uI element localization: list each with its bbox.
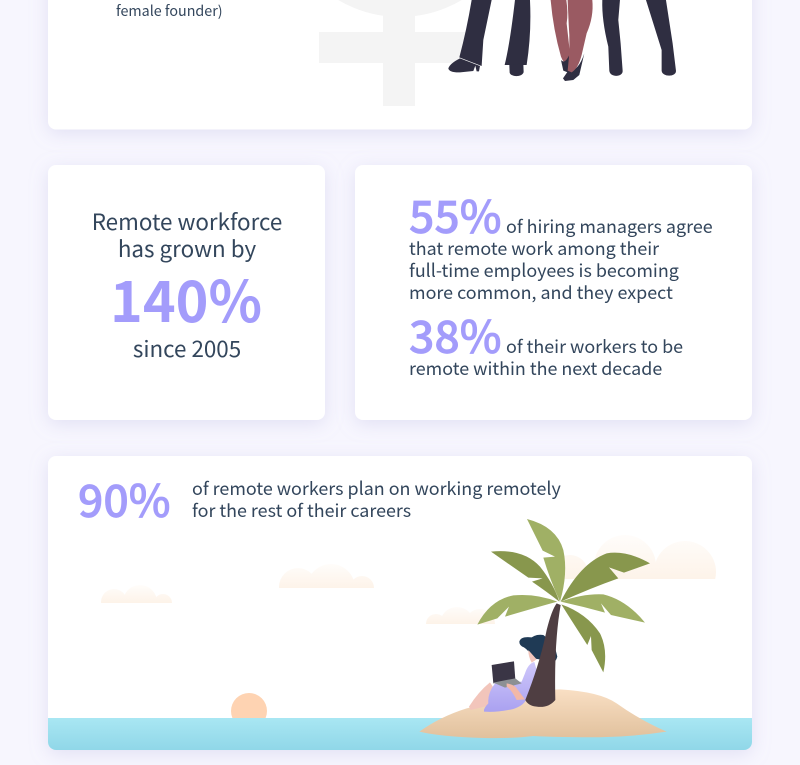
text: workers remote statement: remote within the next decade [409, 355, 662, 381]
panel: hiring managers [355, 165, 752, 420]
text: hiring managers statement: that remote work among their [409, 235, 659, 261]
illustration: island with palm and remote worker [419, 519, 667, 738]
stat: 140%: 140% [110, 257, 262, 339]
text: remote careers statement: of remote workers plan on working remotely [192, 475, 562, 501]
panel: female founders [48, 0, 752, 130]
woman with laptop [469, 635, 557, 712]
stat: 55%: 55% [409, 181, 502, 246]
palm trunk [525, 603, 561, 707]
stat: 38%: 38% [409, 301, 502, 366]
icon: female symbol watermark [319, 0, 473, 106]
stat: 90%: 90% [78, 465, 171, 530]
panel: remote workforce growth [48, 165, 325, 420]
text: hiring managers statement: full-time employees is becoming [409, 257, 679, 283]
palm fronds [477, 519, 650, 672]
text: workers remote statement: of their workers to be [506, 333, 683, 359]
text: hiring managers statement: more common, and they expect [409, 279, 673, 305]
text: remote workforce intro: has grown by [118, 232, 256, 264]
text: hiring managers statement: of hiring managers agree [506, 213, 713, 239]
text: female founder note: female founder) [116, 0, 223, 21]
illustration: women's legs [448, 0, 676, 81]
icon: sun [231, 693, 267, 729]
panel: remote careers [48, 456, 752, 750]
icon: sea [48, 718, 752, 750]
text: remote careers statement: for the rest of their careers [192, 497, 411, 523]
island [419, 689, 667, 738]
text: since 2005: since 2005 [133, 332, 241, 364]
icon: clouds [101, 544, 716, 624]
text: remote workforce intro: Remote workforce [92, 205, 282, 237]
